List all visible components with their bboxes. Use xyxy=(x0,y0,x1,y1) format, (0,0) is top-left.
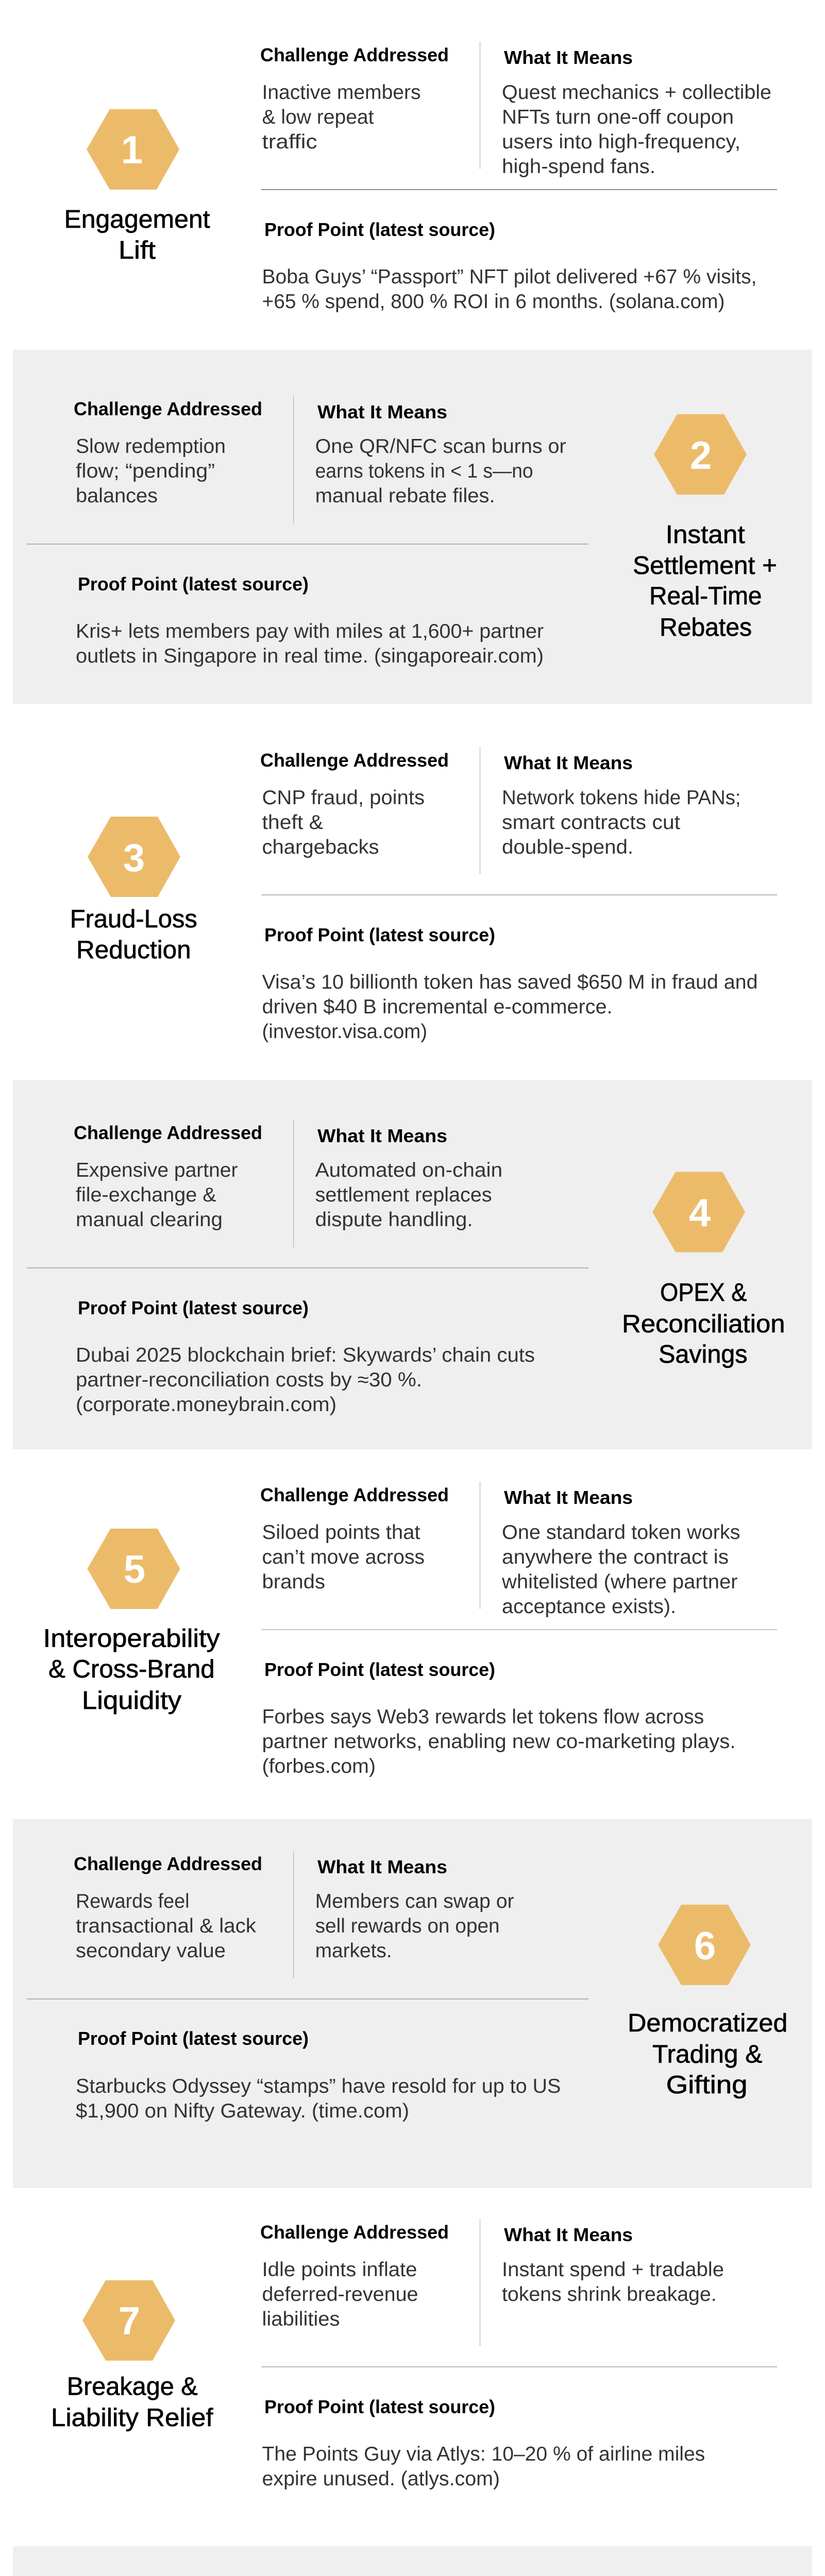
proof point: Starbucks Odyssey “stamps” have resold for up to US xyxy=(76,2075,561,2097)
column: what it means: Members can swap or xyxy=(315,1890,514,1912)
column: challenge addressed: & low repeat xyxy=(262,106,374,128)
column: what it means: What It Means xyxy=(504,752,633,773)
column: challenge addressed: can’t move across xyxy=(262,1546,425,1568)
panel: 5 Interoperability & Cross-Brand Liquidity xyxy=(43,1482,777,1777)
column: what it means: What It Means xyxy=(504,2224,633,2245)
column: what it means: What It Means xyxy=(504,1487,633,1508)
panel: 6 Democratized Trading & Gifting xyxy=(13,1819,812,2188)
icon: hexagon badge 6: 6 xyxy=(694,1924,716,1968)
column: what it means: Network tokens hide PANs; xyxy=(502,787,741,809)
column: what it means: markets. xyxy=(315,1940,392,1962)
column: what it means: Quest mechanics + collectible xyxy=(502,81,771,104)
column: what it means: anywhere the contract is xyxy=(502,1546,729,1568)
column: what it means xyxy=(501,1487,740,1618)
title: Interoperability & Cross-Brand Liquidity: & Cross-Brand xyxy=(48,1655,215,1683)
proof point: Proof Point (latest source) xyxy=(264,219,495,240)
column: challenge addressed xyxy=(260,1484,449,1593)
proof point xyxy=(262,2396,705,2490)
column: challenge addressed: secondary value xyxy=(76,1940,226,1962)
column: challenge addressed: Challenge Addressed xyxy=(260,2222,449,2243)
column: what it means xyxy=(502,2224,724,2306)
column: challenge addressed xyxy=(74,1853,262,1962)
column: what it means: What It Means xyxy=(317,1125,447,1146)
column: challenge addressed: Challenge Addressed xyxy=(260,750,449,771)
proof point: $1,900 on Nifty Gateway. (time.com) xyxy=(76,2100,409,2122)
column: challenge addressed: Challenge Addressed xyxy=(74,1122,262,1143)
panel: 3 Fraud-Loss Reduction xyxy=(70,747,777,1043)
column: what it means: One standard token works xyxy=(502,1521,740,1544)
column: what it means xyxy=(315,401,566,507)
proof point: Boba Guys’ “Passport” NFT pilot delivered +67 % visits, xyxy=(262,266,756,288)
proof point xyxy=(262,219,756,313)
column: what it means xyxy=(315,1125,502,1231)
proof point: The Points Guy via Atlys: 10–20 % of airline miles xyxy=(262,2443,705,2465)
column: challenge addressed: traffic xyxy=(262,131,317,153)
icon: hexagon badge 6 xyxy=(658,1905,751,1985)
column: what it means: double-spend. xyxy=(502,836,633,858)
proof point: driven $40 B incremental e-commerce. xyxy=(262,996,612,1018)
column: challenge addressed: manual clearing xyxy=(76,1209,223,1231)
column: challenge addressed xyxy=(260,44,449,153)
proof point: outlets in Singapore in real time. (singaporeair.com) xyxy=(76,645,544,667)
icon: hexagon badge 5 xyxy=(88,1529,180,1609)
title: Democratized Trading & Gifting: Trading & xyxy=(652,2040,762,2068)
column: challenge addressed: Expensive partner xyxy=(76,1159,238,1181)
title: OPEX & Reconciliation Savings xyxy=(622,1279,785,1368)
proof point: Dubai 2025 blockchain brief: Skywards’ chain cuts xyxy=(76,1344,535,1366)
panel: 8 Zero-Party Data & Transparent Audit xyxy=(13,2546,812,2576)
icon: hexagon badge 2 xyxy=(654,414,747,495)
column: challenge addressed: transactional & lack xyxy=(76,1915,257,1937)
column: challenge addressed: flow; “pending” xyxy=(76,460,215,482)
column: what it means: One QR/NFC scan burns or xyxy=(315,435,566,457)
title: Breakage & Liability Relief xyxy=(51,2373,213,2432)
icon: hexagon badge 5: 5 xyxy=(124,1548,145,1591)
column: challenge addressed xyxy=(260,2222,449,2330)
column: challenge addressed: chargebacks xyxy=(262,836,379,858)
title: Fraud-Loss Reduction xyxy=(70,905,197,964)
icon: hexagon badge 1 xyxy=(87,109,179,190)
title: Democratized Trading & Gifting xyxy=(628,2009,787,2099)
column: what it means: whitelisted (where partner xyxy=(501,1571,738,1593)
proof point: Proof Point (latest source) xyxy=(264,2396,495,2417)
title: Instant Settlement + Real-Time Rebates: Real-Time xyxy=(649,582,762,610)
column: challenge addressed: brands xyxy=(262,1571,325,1593)
proof point: (corporate.moneybrain.com) xyxy=(76,1394,336,1416)
column: challenge addressed: deferred-revenue xyxy=(262,2283,418,2306)
icon: hexagon badge 7 xyxy=(82,2280,175,2361)
column: challenge addressed xyxy=(74,1122,262,1231)
panel: 2 Instant Settlement + Real-Time Rebates xyxy=(13,350,812,704)
column: what it means xyxy=(315,1856,514,1962)
title: Instant Settlement + Real-Time Rebates: Instant xyxy=(666,521,745,549)
column: challenge addressed: Challenge Addressed xyxy=(74,1853,262,1874)
column: challenge addressed: file-exchange & xyxy=(76,1184,216,1206)
column: challenge addressed: Challenge Addressed xyxy=(260,44,449,65)
column: what it means: tokens shrink breakage. xyxy=(502,2283,717,2306)
column: what it means: users into high-frequency, xyxy=(502,131,740,153)
column: challenge addressed: liabilities xyxy=(262,2308,340,2330)
title: Democratized Trading & Gifting: Democratized xyxy=(628,2009,787,2037)
column: what it means: sell rewards on open xyxy=(315,1915,500,1937)
column: what it means: settlement replaces xyxy=(315,1184,492,1206)
title: Instant Settlement + Real-Time Rebates: Rebates xyxy=(660,614,752,641)
proof point: partner networks, enabling new co-marketing plays. xyxy=(262,1731,736,1753)
title: OPEX & Reconciliation Savings: OPEX & xyxy=(660,1279,747,1307)
icon: hexagon badge 4 xyxy=(652,1172,745,1252)
column: what it means: high-spend fans. xyxy=(502,156,655,178)
column: what it means: manual rebate files. xyxy=(315,485,495,507)
proof point: Forbes says Web3 rewards let tokens flow across xyxy=(262,1706,704,1728)
title: Fraud-Loss Reduction: Reduction xyxy=(76,936,191,964)
proof point: Kris+ lets members pay with miles at 1,600+ partner xyxy=(76,620,544,642)
column: challenge addressed xyxy=(260,750,449,858)
icon: hexagon badge 3: 3 xyxy=(123,836,145,880)
column: challenge addressed: Slow redemption xyxy=(76,435,226,457)
column: challenge addressed: CNP fraud, points xyxy=(262,787,425,809)
column: challenge addressed: Inactive members xyxy=(262,81,420,104)
column: challenge addressed: Rewards feel xyxy=(76,1890,190,1912)
proof point: (forbes.com) xyxy=(262,1755,376,1777)
title: Interoperability & Cross-Brand Liquidity: Interoperability xyxy=(43,1625,220,1653)
column: what it means: What It Means xyxy=(504,47,633,68)
title: Interoperability & Cross-Brand Liquidity xyxy=(43,1625,220,1715)
icon: hexagon badge 7: 7 xyxy=(119,2299,140,2343)
panel: 4 OPEX & Reconciliation Savings xyxy=(13,1080,812,1449)
proof point: Proof Point (latest source) xyxy=(264,924,495,945)
column: what it means: Instant spend + tradable xyxy=(502,2259,724,2281)
column: challenge addressed: theft & xyxy=(262,811,323,834)
proof point xyxy=(76,1297,535,1416)
icon: hexagon badge 4: 4 xyxy=(689,1191,711,1235)
proof point: expire unused. (atlys.com) xyxy=(262,2468,500,2490)
proof point xyxy=(76,573,544,667)
title: OPEX & Reconciliation Savings: Reconciliation xyxy=(622,1310,785,1338)
icon: hexagon badge 2: 2 xyxy=(690,434,712,478)
proof point xyxy=(262,924,757,1043)
proof point xyxy=(262,1659,736,1777)
title: Breakage & Liability Relief: Liability Relief xyxy=(51,2404,213,2432)
proof point: +65 % spend, 800 % ROI in 6 months. (solana.com) xyxy=(262,291,725,313)
column: challenge addressed: balances xyxy=(76,485,158,507)
proof point xyxy=(76,2028,561,2122)
proof point: Proof Point (latest source) xyxy=(78,1297,309,1318)
title: Engagement Lift xyxy=(64,206,210,264)
title: Fraud-Loss Reduction: Fraud-Loss xyxy=(70,905,197,933)
icon: hexagon badge 1: 1 xyxy=(121,128,143,172)
proof point: Visa’s 10 billionth token has saved $650 M in fraud and xyxy=(262,971,757,993)
title: Breakage & Liability Relief: Breakage & xyxy=(67,2373,198,2401)
title: Engagement Lift: Engagement xyxy=(64,206,210,233)
column: what it means: Automated on-chain xyxy=(315,1159,502,1181)
column: what it means xyxy=(502,752,741,858)
proof point: (investor.visa.com) xyxy=(262,1021,427,1043)
icon: hexagon badge 3 xyxy=(88,817,180,897)
panel: 7 Breakage & Liability Relief xyxy=(51,2219,777,2490)
column: challenge addressed xyxy=(74,398,262,507)
title: Instant Settlement + Real-Time Rebates xyxy=(633,521,777,641)
column: what it means: What It Means xyxy=(317,1856,447,1877)
title: Democratized Trading & Gifting: Gifting xyxy=(666,2071,748,2099)
column: challenge addressed: Challenge Addressed xyxy=(74,398,262,419)
column: what it means: acceptance exists). xyxy=(502,1596,676,1618)
column: what it means: What It Means xyxy=(317,401,447,422)
column: challenge addressed: Challenge Addressed xyxy=(260,1484,449,1505)
proof point: partner-reconciliation costs by ≈30 %. xyxy=(76,1369,422,1391)
title: Instant Settlement + Real-Time Rebates: Settlement + xyxy=(633,552,777,580)
column: what it means xyxy=(502,47,771,178)
column: what it means: NFTs turn one-off coupon xyxy=(502,106,734,128)
title: OPEX & Reconciliation Savings: Savings xyxy=(659,1341,747,1368)
proof point: Proof Point (latest source) xyxy=(78,573,309,595)
column: what it means: dispute handling. xyxy=(315,1209,473,1231)
title: Engagement Lift: Lift xyxy=(119,236,156,264)
column: challenge addressed: Idle points inflate xyxy=(262,2259,417,2281)
column: what it means: smart contracts cut xyxy=(502,811,680,834)
column: what it means: earns tokens in < 1 s—no xyxy=(315,460,533,482)
column: challenge addressed: Siloed points that xyxy=(262,1521,420,1544)
panel: 1 Engagement Lift xyxy=(64,42,777,313)
proof point: Proof Point (latest source) xyxy=(78,2028,309,2049)
proof point: Proof Point (latest source) xyxy=(264,1659,495,1680)
title: Interoperability & Cross-Brand Liquidity: Liquidity xyxy=(82,1687,182,1715)
